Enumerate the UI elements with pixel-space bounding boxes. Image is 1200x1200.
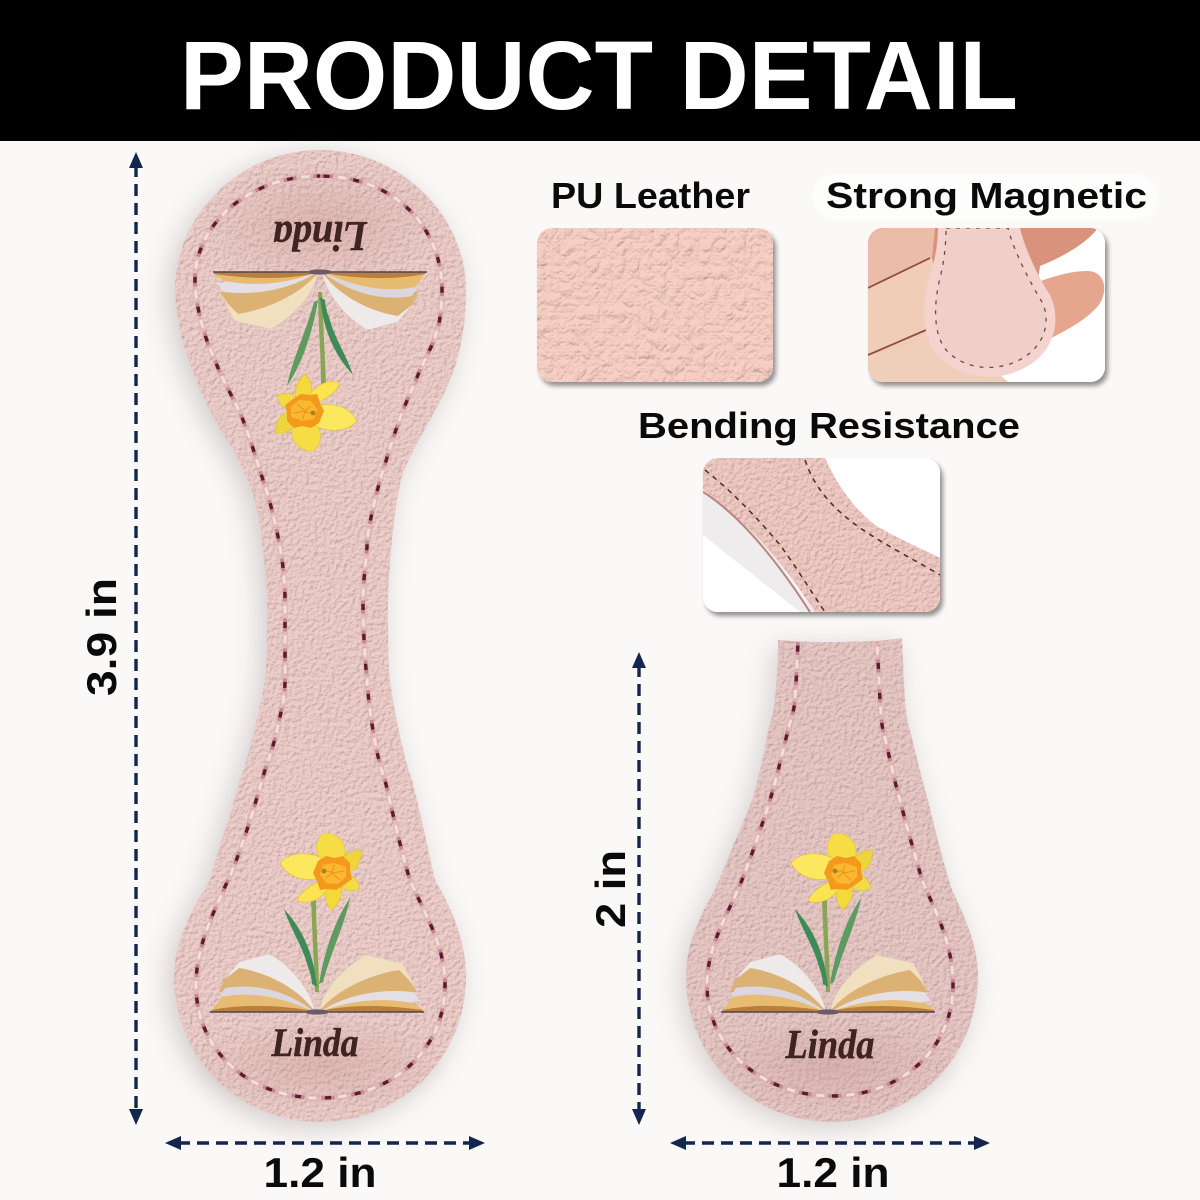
label: PU Leather — [551, 175, 750, 216]
long magnetic bookmark — [168, 150, 466, 1128]
dimension: long bookmark height 3.9 in — [78, 152, 143, 1125]
feature: PU Leather — [537, 175, 773, 382]
dimension: short bookmark height 2 in: 2 in — [587, 850, 634, 928]
bottom name: Linda — [271, 1020, 358, 1065]
stitching — [707, 642, 953, 1096]
label: Bending Resistance — [638, 405, 1020, 446]
photo: bookmark held in hand — [868, 228, 1105, 382]
dimension: short bookmark height 2 in — [587, 652, 646, 1125]
feature: Strong Magnetic — [812, 174, 1158, 382]
feature: Bending Resistance — [638, 405, 1020, 612]
top name: Linda — [273, 212, 368, 258]
dimension: short bookmark width 1.2 in: 1.2 in — [776, 1149, 890, 1196]
title: PRODUCT DETAIL — [180, 21, 1018, 130]
short magnetic bookmark — [681, 638, 978, 1128]
dimension: long bookmark height 3.9 in: 3.9 in — [78, 578, 125, 696]
dimension: long bookmark width 1.2 in — [165, 1136, 485, 1196]
illustration: open book and daffodil — [721, 833, 935, 1015]
top illustration: upside-down book and daffodil — [213, 269, 427, 451]
name: Linda — [785, 1021, 874, 1067]
dimension: short bookmark width 1.2 in — [670, 1136, 990, 1196]
label backdrop and text: Strong Magnetic — [826, 175, 1147, 216]
stitching — [195, 176, 445, 1098]
photo: bent leather strap — [703, 458, 940, 612]
dimension: long bookmark width 1.2 in: 1.2 in — [264, 1149, 376, 1196]
photo: leather swatch — [537, 228, 773, 382]
bottom illustration: open book and daffodil — [210, 833, 424, 1015]
title banner — [0, 0, 1200, 141]
